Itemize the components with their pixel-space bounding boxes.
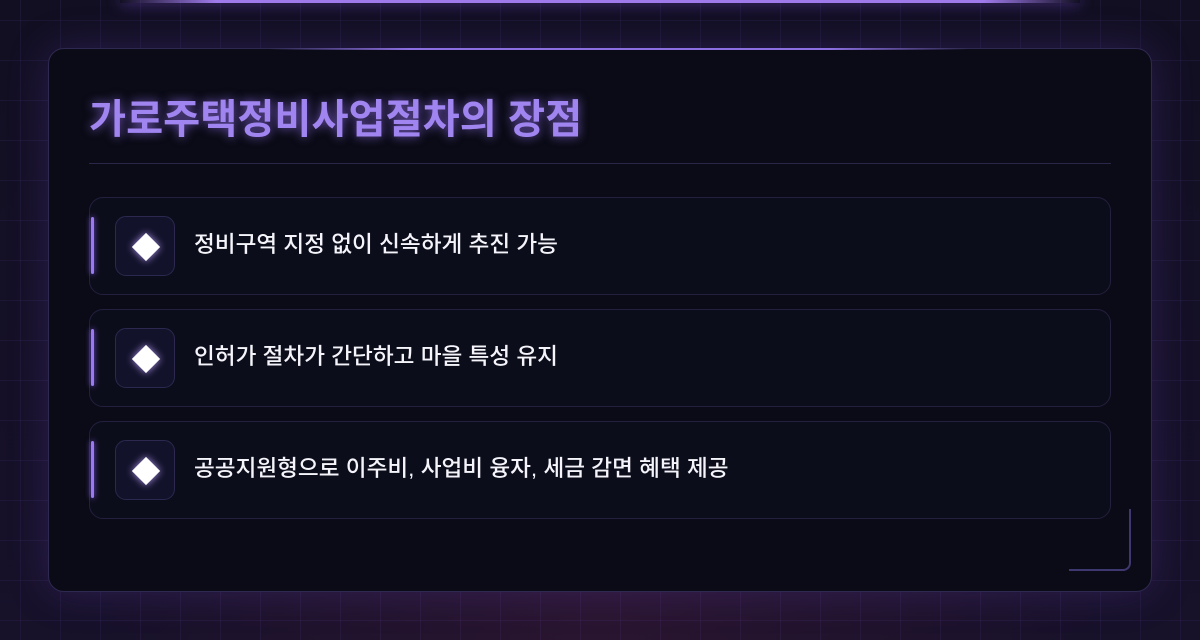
icon: diamond	[115, 328, 175, 388]
icon: diamond	[115, 216, 175, 276]
text 1: 정비구역 지정 없이 신속하게 추진 가능	[194, 232, 558, 257]
text 3: 공공지원형으로 이주비, 사업비 융자, 세금 감면 혜택 제공	[194, 456, 729, 481]
item 2	[89, 309, 1111, 407]
item 1	[89, 197, 1111, 295]
panel: main card	[48, 48, 1152, 592]
text 2: 인허가 절차가 간단하고 마을 특성 유지	[194, 344, 558, 369]
top accent bar	[120, 0, 1080, 3]
title: 가로주택정비사업절차의 장점	[89, 97, 582, 142]
item 3	[89, 421, 1111, 519]
corner decoration	[1069, 509, 1131, 571]
icon: diamond	[115, 440, 175, 500]
